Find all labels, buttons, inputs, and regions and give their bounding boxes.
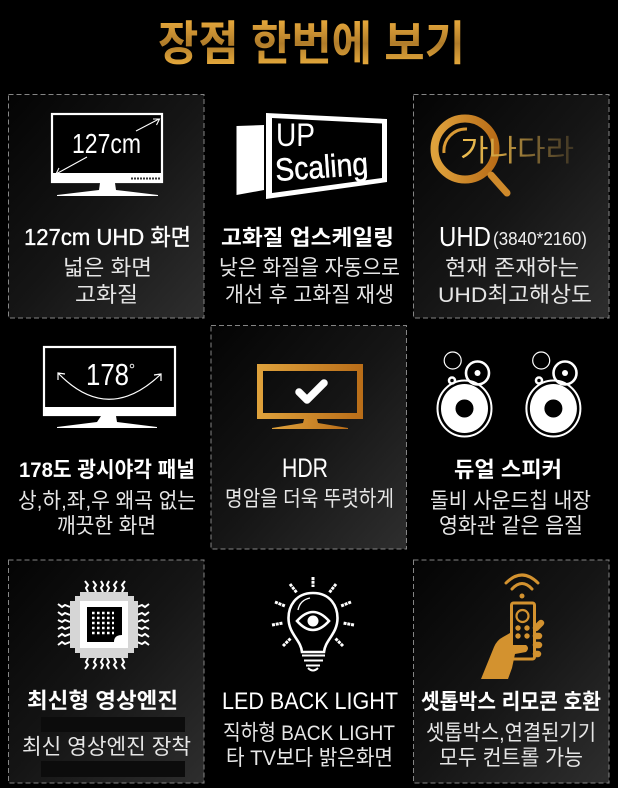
text block	[430, 489, 591, 538]
text block	[18, 489, 196, 538]
icon: left speaker	[438, 352, 492, 436]
heading: HDR	[282, 453, 328, 483]
icon: monitor 178	[43, 347, 176, 428]
text block: 현재 존재하는	[445, 256, 579, 280]
icon: up scaling screen: UP	[276, 117, 315, 153]
text block: 셋톱박스,연결된기기	[426, 721, 596, 745]
text block: 명암을 더욱 뚜렷하게	[225, 487, 394, 511]
heading: LED BACK LIGHT	[222, 688, 398, 715]
panel: dual speakers	[430, 352, 591, 538]
icon: magnifier	[434, 118, 574, 193]
heading	[439, 221, 587, 252]
icon: up scaling screen: Scaling	[274, 146, 369, 188]
icon: hand holding remote	[481, 575, 541, 679]
heading: 최신형 영상엔진	[27, 689, 178, 713]
panel: 127cm UHD screen	[8, 94, 204, 318]
panel: video engine	[8, 560, 204, 783]
panel: HDR	[211, 326, 406, 549]
text block	[219, 256, 400, 307]
heading: (3840*2160)	[493, 229, 587, 249]
icon: monitor 127cm	[52, 114, 162, 196]
text block: 낮은 화질을 자동으로	[219, 256, 400, 280]
panel: 178 degree viewing angle	[18, 347, 196, 538]
panel: upscaling	[219, 113, 400, 307]
heading: 178도 광시야각 패널	[19, 458, 195, 482]
text block: 타 TV보다 밝은화면	[226, 746, 393, 770]
text block: 깨끗한 화면	[57, 514, 156, 538]
icon: monitor 178: 178	[86, 357, 129, 392]
text block: 개선 후 고화질 재생	[225, 283, 394, 307]
text block: 모두 컨트롤 가능	[439, 746, 583, 770]
icon: magnifier: 가나다라	[460, 135, 574, 168]
icon: right speaker	[526, 352, 580, 436]
text block	[223, 721, 395, 770]
text block: UHD최고해상도	[438, 283, 592, 307]
redaction bar: top	[41, 717, 185, 732]
text block: 최신 영상엔진 장착	[22, 735, 191, 759]
panel: LED back light	[222, 577, 398, 770]
icon: gold monitor with check	[257, 364, 363, 429]
icon: monitor 127cm: 127cm	[72, 128, 141, 159]
icon: chip	[58, 581, 149, 669]
icon: up scaling screen	[236, 113, 387, 199]
icon: light bulb with eye	[272, 577, 354, 670]
heading: UHD	[439, 221, 491, 252]
text block	[63, 256, 152, 307]
text block: 돌비 사운드칩 내장	[430, 489, 591, 513]
title: 장점 한번에 보기	[158, 17, 465, 70]
text block	[438, 256, 592, 307]
heading: 고화질 업스케일링	[221, 226, 394, 250]
text block: 고화질	[75, 283, 138, 307]
heading: 127cm UHD 화면	[24, 224, 191, 250]
panel: UHD resolution	[414, 94, 609, 318]
heading: 듀얼 스피커	[454, 458, 562, 482]
redaction bar: bottom	[41, 761, 185, 777]
text block: 직하형 BACK LIGHT	[223, 721, 395, 745]
text block: 상,하,좌,우 왜곡 없는	[18, 489, 196, 513]
text block: 영화관 같은 음질	[439, 514, 583, 538]
text block: 넓은 화면	[63, 256, 152, 280]
heading: 셋톱박스 리모콘 호환	[421, 690, 601, 714]
panel: set-top remote	[414, 560, 609, 783]
text block	[426, 721, 596, 770]
